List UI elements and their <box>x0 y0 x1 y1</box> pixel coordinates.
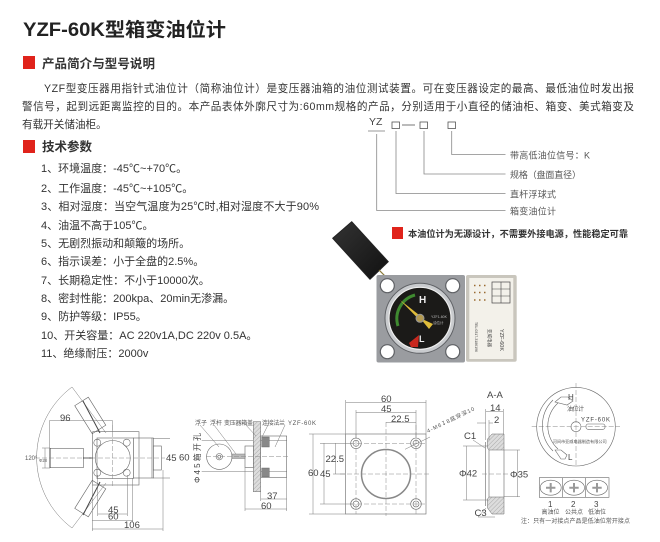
drawing: mounting flange <box>308 394 476 516</box>
drawing: mounting flange: 45 <box>320 469 331 480</box>
product photo: oil level gauge <box>333 222 517 362</box>
drawing: float swing front view: 96 <box>60 413 71 424</box>
text block: parameter list <box>41 161 319 360</box>
drawing: section A-A: Φ35 <box>510 470 528 480</box>
model code diagram: 规格（盘面直径） <box>510 169 581 180</box>
text block: parameter list: 2、工作温度：-45℃~+105℃。 <box>41 181 193 195</box>
heading: technical parameters: 技术参数 <box>42 139 92 154</box>
drawing: gauge back view and terminals: 1 <box>548 500 553 509</box>
drawing: side section view: 变压器箱盖 <box>224 419 253 427</box>
drawing: mounting flange: 45 <box>381 404 392 415</box>
text block: parameter list: 3、相对湿度：当空气温度为25℃时,相对湿度不大于90% <box>41 199 319 213</box>
text block: intro paragraph: 有载开关储油柜。 <box>22 118 107 131</box>
drawing: side section view: 浮子 <box>195 419 207 427</box>
drawing: side section view <box>192 419 316 512</box>
drawing: section A-A: 2 <box>494 415 499 426</box>
terminal panel <box>466 275 517 362</box>
product photo: oil level gauge: 亚威电器 <box>486 329 493 347</box>
drawing: section A-A: Φ42 <box>459 468 477 480</box>
text block: parameter list: 11、绝缘耐压：2000v <box>41 346 149 360</box>
drawing: mounting flange: 60 <box>381 394 392 405</box>
drawing: mounting flange: 22.5 <box>391 414 410 425</box>
drawing: gauge back view and terminals: 3 <box>594 500 599 509</box>
drawing: section A-A: C1 <box>464 431 476 442</box>
product photo: oil level gauge: L <box>419 334 425 344</box>
model code diagram: 箱变油位计 <box>510 206 556 216</box>
drawing: side section view: 37 <box>267 491 278 502</box>
drawing: float swing front view: 106 <box>124 520 140 531</box>
drawing: float swing front view: 45 <box>108 505 119 516</box>
drawing: gauge back view and terminals: H <box>568 393 574 402</box>
drawing: gauge back view and terminals: 河间市亚威电器制造有限公司 <box>553 438 607 445</box>
text block: parameter list: 9、防护等级：IP55。 <box>41 309 147 323</box>
heading: product intro: 产品简介与型号说明 <box>42 56 155 71</box>
text block: intro paragraph <box>22 82 634 131</box>
product photo: oil level gauge: H <box>419 295 426 306</box>
drawing: float swing front view: 60 <box>179 452 190 464</box>
drawing: gauge back view and terminals: YZF-60K <box>581 418 610 424</box>
text block: intro paragraph: 警信号，起到远距离监控的目的。本产品表体外廓尺寸为:60mm规格的产品，分别适用于小直径的储油柜、箱变、美式箱变及 <box>22 100 634 113</box>
drawing: side section view: 浮杆 <box>210 419 222 427</box>
gauge dial <box>385 283 455 353</box>
title: YZF-60K型箱变油位计 <box>23 18 226 41</box>
model code diagram: YZ <box>369 116 383 128</box>
drawing: section A-A: A-A <box>487 390 504 401</box>
drawing: float swing front view: 120° <box>25 456 38 462</box>
text block: parameter list: 8、密封性能：200kpa、20min无渗漏。 <box>41 291 234 305</box>
text block: parameter list: 1、环境温度：-45℃~+70℃。 <box>41 161 187 175</box>
drawing: section A-A <box>459 390 528 519</box>
product photo: oil level gauge: 油位计 <box>433 320 444 325</box>
drawing: gauge back view and terminals: 公共点 <box>565 508 583 516</box>
product photo: oil level gauge: TEL:0317-3186196 <box>474 322 478 352</box>
text block: parameter list: 10、开关容量：AC 220v1A,DC 220v 0.5A。 <box>41 328 257 342</box>
drawing: gauge back view and terminals: 低油位 <box>588 508 606 516</box>
drawing: mounting flange: 60 <box>308 468 319 479</box>
drawing: float swing front view: 60 <box>108 512 119 522</box>
float cylinder <box>333 222 388 279</box>
heading: technical parameters <box>23 139 92 154</box>
text block: intro paragraph: YZF型变压器用指针式油位计（简称油位计）是变压器油箱的油位测试装置。可在变压器设定的最高、最低油位时发出报 <box>44 82 634 95</box>
drawing: side section view: YZF-60K <box>288 421 316 427</box>
drawing: side section view: 60 <box>261 501 272 512</box>
drawing: float swing front view <box>25 387 190 531</box>
terminal block <box>539 478 609 497</box>
drawing: float swing front view: Φ28 <box>39 458 48 463</box>
drawing: mounting flange: 22.5 <box>326 454 344 465</box>
drawing: section A-A: 14 <box>490 403 501 414</box>
drawing: gauge back view and terminals: 2 <box>571 500 576 509</box>
gauge plate <box>376 275 465 362</box>
callout: passive design note: 本油位计为无源设计，不需要外接电源，性能稳定可靠 <box>408 228 628 239</box>
model code diagram: 带高低油位信号：K <box>510 150 590 160</box>
drawing: mounting flange: 4-M6↧8底穿深10 <box>425 405 476 435</box>
drawing: gauge back view and terminals: L <box>568 453 573 462</box>
text block: parameter list: 5、无剧烈振动和颠簸的场所。 <box>41 236 190 250</box>
drawing: gauge back view and terminals: 高油位 <box>542 508 560 516</box>
drawing: side section view: 连接法兰 <box>262 419 285 427</box>
drawing: float swing front view: 45 <box>166 453 177 464</box>
model code diagram: 直杆浮球式 <box>510 188 556 200</box>
drawing: gauge back view and terminals: 油位计 <box>567 405 584 413</box>
text block: parameter list: 7、长期稳定性：不小于10000次。 <box>41 273 210 287</box>
drawing: gauge back view and terminals: 注：只有一对接点产品是低油位常开接点 <box>521 517 630 525</box>
drawing: gauge back view and terminals <box>521 383 630 525</box>
product photo: oil level gauge: YZF1-60K <box>431 315 448 319</box>
drawing: side section view: Φ45箱开孔 <box>192 433 202 483</box>
drawing: section A-A: C3 <box>474 508 487 519</box>
text block: parameter list: 6、指示误差：小于全盘的2.5%。 <box>41 254 204 268</box>
text block: parameter list: 4、油温不高于105℃。 <box>41 218 153 232</box>
model code diagram <box>368 116 590 216</box>
product photo: oil level gauge: YZF-60K <box>498 329 504 351</box>
